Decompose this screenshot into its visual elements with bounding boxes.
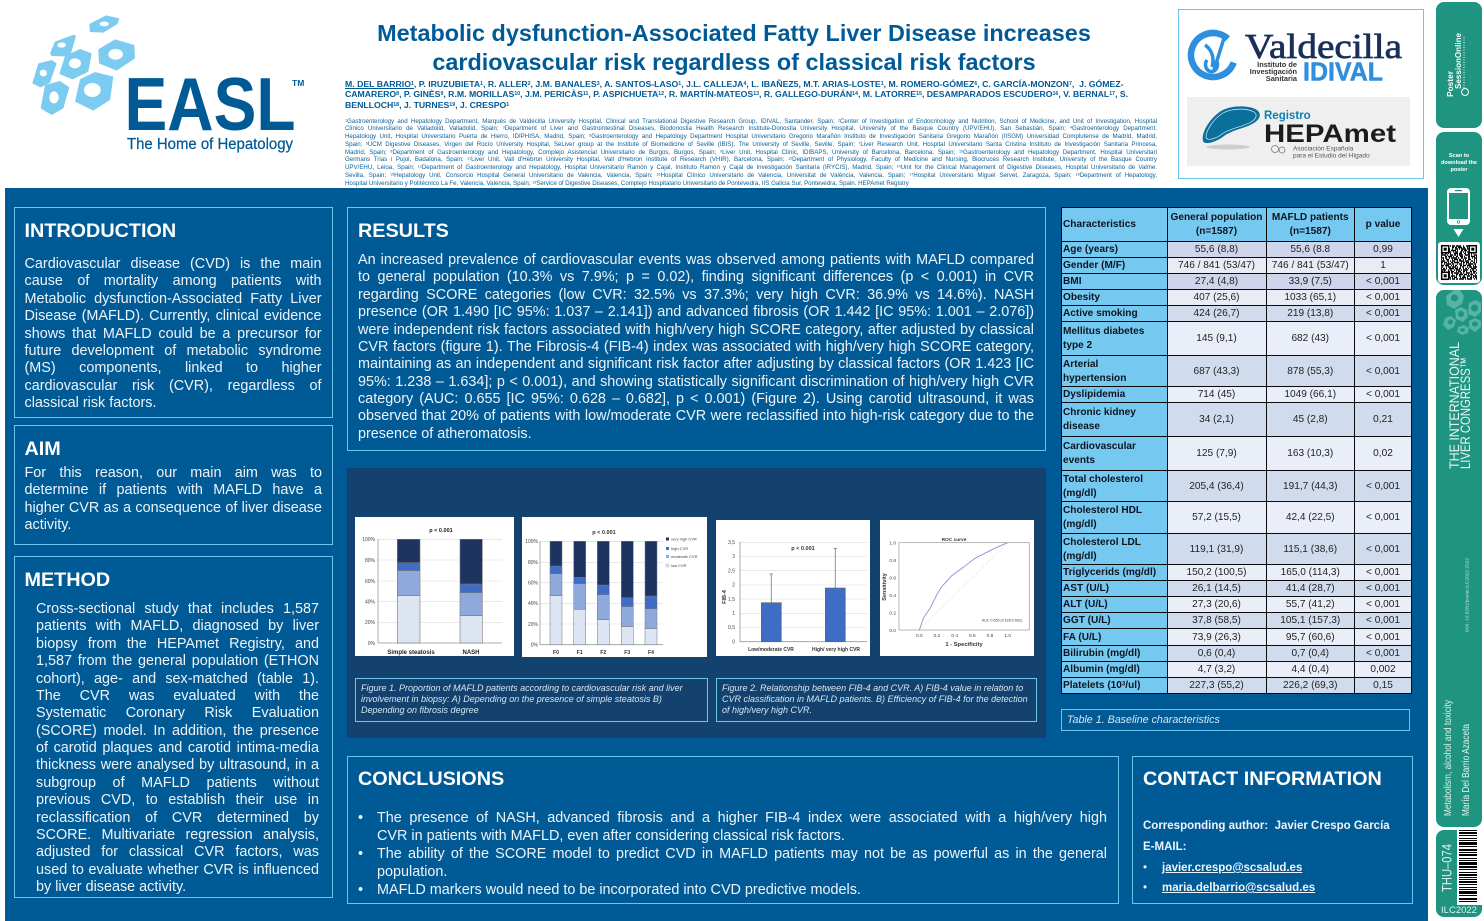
table: baseline characteristics: < 0,001	[1366, 544, 1400, 554]
chart: FIB-4 by CVR: 2,5	[728, 568, 735, 574]
table: baseline characteristics: Age (years)	[1063, 244, 1118, 255]
text: method: previous CVD, to establish their use in	[36, 792, 319, 808]
affiliations: Germans Trias i Pujol, Badalona, Spain; 11Liver Unit, Vall d'Hebron University Hospital, Vall d'Hebron Institute of Research (VHIR), Barcelona, Spain; 12Department of Physiology, Faculty of Medicine and Nursing, Biocruces Research Institute, University of the Basque Country	[345, 156, 1157, 163]
table: baseline characteristics: Triglycerids (mg/dl)	[1063, 567, 1156, 578]
text: introduction: Metabolic dysfunction-Associated Fatty Liver	[24, 291, 322, 307]
side strip: poster session online	[1436, 2, 1482, 128]
title: cardiovascular risk regardless of classical risk factors	[432, 49, 1036, 75]
table: baseline characteristics: 55,7 (41,2)	[1286, 599, 1335, 610]
table: baseline characteristics: 191,7 (44,3)	[1283, 480, 1337, 492]
table: baseline characteristics: type 2	[1063, 340, 1092, 351]
table: baseline characteristics: 34 (2,1)	[1199, 414, 1234, 425]
figure 2 caption: Figure 2. Relationship between FIB-4 and CVR. A) FIB-4 value in relation to	[722, 683, 1023, 693]
chart: CVR by fibrosis degree	[522, 517, 707, 657]
text: conclusions: population.	[377, 864, 447, 880]
panel: contact information	[1132, 756, 1413, 904]
text: introduction: cause of mortality among patients with	[24, 273, 322, 289]
logo: Valdecilla IDIVAL: IDIVAL	[1303, 56, 1383, 86]
chart: CVR by fibrosis degree: 20%	[528, 622, 539, 628]
chart: ROC curve: 0.6	[889, 576, 896, 582]
table: baseline characteristics: 41,4 (28,7)	[1286, 583, 1335, 594]
figure 2 caption: of high/very high CVR.	[722, 705, 812, 715]
table: baseline characteristics: 33,9 (7,5)	[1289, 276, 1332, 287]
table: baseline characteristics: 55,6 (8,8)	[1195, 244, 1238, 255]
text: conclusions: The ability of the SCORE model to predict CVD in MAFLD patients may not be as powerful as in the general	[377, 846, 1107, 862]
figure 1 caption: Figure 1. Proportion of MAFLD patients according to cardiovascular risk and liver	[361, 683, 683, 693]
text: method: biopsy from the HEPAmet Registry, and	[36, 636, 319, 652]
table: baseline characteristics: MAFLD patients	[1272, 212, 1349, 223]
table: baseline characteristics: 407 (25,6)	[1193, 292, 1240, 303]
table: baseline characteristics: Platelets (103/ul)	[1063, 680, 1140, 691]
logo: Registro HEPAmet: Asociación Española	[1293, 146, 1354, 152]
text: results: were independent risk factors associated with high/very high SCORE category, after adjusted by classical	[358, 322, 1034, 338]
table: baseline characteristics: 125 (7,9)	[1196, 448, 1237, 459]
chart legend: low CVR	[671, 563, 687, 568]
authors: M. DEL BARRIO1, P. IRUZUBIETA1, R. ALLER2, J.M. BANALES3, A. SANTOS-LASO1, J.L. CALLEJA4, L. IBAÑEZ5, M.T. ARIAS-LOSTE1, M. ROMERO-GÓMEZ6, C. GARCÍA-MONZON7, J. GÓMEZ-	[345, 79, 1124, 89]
chart: ROC curve: 0.4	[951, 633, 958, 639]
text: conclusions	[377, 810, 1107, 898]
text: method: SCORE. Multivariate regression analysis,	[36, 827, 319, 843]
bullet markers: •	[358, 810, 363, 826]
chart: FIB-4 by CVR: 0,5	[728, 625, 735, 631]
side strip logo text: Poster	[1446, 71, 1455, 97]
text: method: thickness were analysed by ultrasound, in a	[36, 757, 319, 773]
QR code	[1438, 242, 1480, 283]
heading: method: METHOD	[24, 569, 110, 591]
panel: results	[347, 207, 1046, 451]
text: introduction: shows that MAFLD could be a precursor for	[24, 326, 322, 342]
text: results: observed that 20% of patients with low/moderate CVR were reclassified into high-risk category due to the	[358, 408, 1034, 424]
table: baseline characteristics: Gender (M/F)	[1063, 260, 1125, 271]
panel: introduction	[14, 207, 333, 418]
affiliations: Hepatology Unit, Hospital Universitario Puerta de Hierro, IDIPHISA, Madrid, Spain; 5Gastroenterology and Hepatology Department Hospital Universitario Gregorio Marañón Instituto de Investigación Sanitaria Gregorio Marañón (IISGM) Universidad Complutense de Madrid, Madrid,	[345, 133, 1157, 140]
chart: FIB-4 by CVR	[716, 520, 870, 656]
table: baseline characteristics: 0,15	[1373, 680, 1393, 691]
text: aim: higher CVR as a consequence of liver disease	[24, 500, 322, 516]
table: baseline characteristics: 1033 (65,1)	[1284, 292, 1336, 303]
table: baseline characteristics: < 0,001	[1366, 276, 1400, 287]
panel: aim	[14, 425, 333, 545]
text: method: Cross-sectional study that includes 1,587	[36, 601, 319, 617]
chart: CVR by fibrosis degree: 100%	[525, 539, 539, 545]
table: baseline characteristics: 37,8 (58,5)	[1192, 615, 1241, 626]
trademark: TM	[292, 78, 304, 88]
side strip: scan to download	[1436, 132, 1482, 285]
figure 1 caption	[355, 678, 708, 722]
chart: FIB-4 by CVR: 1,5	[728, 597, 735, 603]
text: method: Systematic Coronary Risk Evaluation	[36, 705, 319, 721]
table: baseline characteristics: (n=1587)	[1196, 226, 1237, 237]
text: results: maintaining as an independent and significant risk factor after adjusting by classical factors (OR 1.423 [IC	[358, 356, 1034, 372]
table: baseline characteristics: 746 / 841 (53/47)	[1272, 260, 1349, 271]
text: e-mail addresses: javier.crespo@scsalud.es	[1162, 862, 1302, 874]
table: baseline characteristics: Dyslipidemia	[1063, 389, 1125, 400]
logo: Registro HEPAmet: Registro	[1264, 110, 1311, 122]
chart: FIB-4 by CVR: FIB-4	[722, 589, 728, 604]
table: baseline characteristics: 1	[1380, 260, 1386, 271]
hexagon decoration and rotated labels: Metabolism, alcohol and toxicity	[1442, 699, 1454, 816]
chart: FIB-4 by CVR: p < 0.001	[791, 546, 815, 552]
chart: ROC curve: 1 - Specificity	[945, 642, 983, 648]
authors: BENLLOCH18, J. TURNES19, J. CRESPO1	[345, 100, 509, 110]
text: method: cohort), age- and sex-matched (table 1).	[36, 670, 319, 686]
table: baseline characteristics: Obesity	[1063, 292, 1100, 303]
text: results: 95%: 1.238 – 1.634]; p < 0.001), and showing statistically significant discrimination of high/very high CVR	[358, 374, 1034, 390]
main blue background	[5, 188, 1428, 921]
table: baseline characteristics: 0,002	[1370, 664, 1396, 675]
affiliations: 1Gastroenterology and Hepatology Department, Marqués de Valdecilla University Hospital, Clinical and Translational Digestive Research Group, IDIVAL, Santander, Spain; 2Center of Investigation of Endocrinology and Nutrition, School of Medicine, and Unit of Investigation, Hospital	[345, 118, 1157, 124]
side strip logo text: SessionOnline	[1454, 32, 1463, 89]
table: baseline characteristics: < 0,001	[1366, 567, 1400, 578]
text: method: adjusted for classical CVR factors, was	[36, 844, 319, 860]
table: baseline characteristics: 878 (55,3)	[1287, 366, 1333, 376]
table: baseline characteristics: Cardiovascular	[1063, 441, 1136, 452]
table: baseline characteristics: < 0,001	[1366, 599, 1400, 610]
table: baseline characteristics: 205,4 (36,4)	[1189, 480, 1244, 492]
chart: CVR by fibrosis degree: 60%	[528, 580, 539, 586]
table: baseline characteristics: < 0,001	[1366, 389, 1400, 400]
side strip: congress and session details	[1436, 290, 1482, 827]
table: baseline characteristics: 55,6 (8.8	[1290, 244, 1330, 255]
table: baseline characteristics: Total cholesterol	[1063, 474, 1143, 484]
bullet markers	[358, 810, 363, 898]
table: baseline characteristics: 105,1 (157,3)	[1280, 615, 1340, 626]
chart: FIB-4 by CVR: 3,5	[728, 540, 735, 546]
affiliations: Spain; 6UCM Digestive Diseases, Virgen del Rocío University Hospital, SeLiver group at the Institute of Biomedicine of Seville (IBIS), The University of Seville, Seville, Spain; 7Liver Research Unit, Hospital Universitario Santa Cristina Instituto de Investigación Sanitaria Princesa,	[345, 141, 1157, 148]
chart: ROC curve: 0.0	[916, 633, 923, 639]
text: method	[36, 601, 319, 895]
table: baseline characteristics: Characteristics	[1063, 219, 1136, 230]
table: baseline characteristics: 4,4 (0,4)	[1291, 664, 1329, 675]
chart: ROC curve: 0.6	[969, 633, 976, 639]
table: baseline characteristics: 57,2 (15,5)	[1192, 512, 1241, 523]
chart: CVR by steatosis: 60%	[365, 579, 376, 585]
table: baseline characteristics: < 0,001	[1366, 512, 1400, 523]
chart: CVR by steatosis: p < 0.001	[429, 528, 453, 534]
text: results	[358, 252, 1034, 442]
chart: ROC curve: 1.0	[889, 540, 896, 546]
scan prompt: Scan to download the poster	[1441, 153, 1477, 173]
poster number: THU–074	[1438, 844, 1454, 892]
hexagon decoration and rotated labels: THE INTERNATIONAL	[1447, 342, 1462, 469]
table: baseline characteristics: 0,99	[1373, 244, 1393, 255]
table: baseline characteristics: < 0,001	[1366, 615, 1400, 626]
title: Metabolic dysfunction-Associated Fatty Liver Disease increases	[377, 20, 1091, 46]
text: method: reclassification of CVR determined by	[36, 810, 319, 826]
figure 2 caption	[716, 678, 1037, 722]
text: introduction: (MS) components, linked to higher	[24, 360, 322, 376]
table: baseline characteristics: 26,1 (14,5)	[1192, 583, 1241, 594]
text: aim	[24, 465, 322, 533]
figure 1 caption: Depending on fibrosis degree	[361, 705, 479, 715]
table: baseline characteristics: ALT (U/L)	[1063, 599, 1108, 610]
table: baseline characteristics: 95,7 (60,6)	[1286, 632, 1335, 642]
partner logos box	[1178, 9, 1424, 179]
chart: ROC curve: 0.2	[889, 610, 896, 616]
chart: CVR by fibrosis degree: 80%	[528, 560, 539, 566]
text: conclusions: CVR in patients with MAFLD, even after considering classical risk factors.	[377, 828, 845, 844]
table: baseline characteristics: 714 (45)	[1198, 389, 1235, 400]
chart: FIB-4 by CVR: 0	[732, 640, 735, 646]
affiliations: Clínico Universitario de Valladolid, Valladolid, Spain; 3Department of Liver and Gastrointestinal Diseases, Biodonostia Health Research Institute-Donostia University Hospital, University of the Basque Country (UPV/EHU), San Sebastián, Spain; 4Gastroenterology Department.	[345, 125, 1157, 132]
text: e-mail addresses	[1143, 862, 1316, 894]
table: baseline characteristics: Bilirubin (mg/dl)	[1063, 648, 1140, 659]
chart: ROC curve: 0.2	[934, 633, 941, 639]
affiliations: Sevilla, Spain; 15Hepatology Unit, Consorcio Hospital General Universitario de Valencia, Valencia, Spain; 16Hospital Clínico Universitario de Valencia, Universitat de València, Valencia, Spain; 17Hospital Universitario Miguel Servet, Zaragoza, Spain; 18Department of Hepatology,	[345, 172, 1157, 179]
table: baseline characteristics: Mellitus diabetes	[1063, 326, 1144, 337]
chart: ROC curve: 0.0	[889, 628, 896, 634]
chart: FIB-4 by CVR: 1	[732, 611, 735, 617]
table: baseline characteristics: 0,6 (0,4)	[1198, 648, 1235, 659]
table: baseline characteristics: 42,4 (22,5)	[1286, 512, 1335, 523]
table: baseline characteristics: AST (U/L)	[1063, 583, 1109, 594]
table: baseline characteristics: 145 (9,1)	[1196, 333, 1237, 344]
text: method: (SCORE) model. In addition, the presence	[36, 723, 319, 739]
affiliations	[345, 118, 1157, 187]
text: introduction: future development of metabolic syndrome	[24, 343, 322, 359]
table: baseline characteristics: < 0,001	[1366, 583, 1400, 594]
chart: CVR by steatosis: 20%	[365, 620, 376, 626]
chart legend	[666, 536, 698, 568]
heading: introduction: INTRODUCTION	[24, 220, 176, 242]
chart legend: very high CVR	[671, 536, 697, 542]
chart: CVR by steatosis: NASH	[462, 650, 480, 656]
text: method: used to evaluate whether CVR is influenced	[36, 862, 319, 878]
table: baseline characteristics: 687 (43,3)	[1193, 366, 1240, 376]
logo: Registro HEPAmet: para el Estudio del Hígado	[1293, 152, 1370, 160]
table: baseline characteristics: < 0,001	[1366, 480, 1400, 492]
table: baseline characteristics: Arterial	[1063, 358, 1098, 370]
text: conclusions: MAFLD markers would need to be incorporated into CVD predictive models.	[377, 882, 861, 898]
chart: CVR by fibrosis degree: F1	[577, 650, 583, 656]
chart: CVR by steatosis: Simple steatosis	[387, 650, 435, 656]
chart: ROC curve: 0.4	[889, 593, 896, 599]
panel: conclusions	[347, 756, 1119, 904]
chart legend: high CVR	[671, 546, 688, 551]
chart: FIB-4 by CVR: Low/moderate CVR	[748, 647, 794, 653]
panel: figures	[347, 468, 1046, 738]
table: baseline characteristics: < 0,001	[1366, 333, 1400, 344]
table: baseline characteristics: FA (U/L)	[1063, 632, 1101, 642]
text: results: CVR factors (figure 1). The Fibrosis-4 (FIB-4) index was associated with high/very high SCORE category,	[358, 339, 1034, 355]
text: method: subgroup of MAFLD patients without	[36, 775, 319, 791]
logo: Valdecilla IDIVAL: Sanitaria	[1266, 74, 1298, 83]
table: baseline characteristics: 226,2 (69,3)	[1283, 680, 1337, 691]
text: method: The CVR was evaluated with the	[36, 688, 319, 704]
table: baseline characteristics: General population	[1170, 212, 1262, 223]
logo: Registro HEPAmet: HEPAmet	[1264, 120, 1397, 148]
text: conclusions: The presence of NASH, advanced fibrosis and a higher FIB-4 index were associated with a high/very high	[377, 810, 1107, 826]
table: baseline characteristics: < 0,001	[1366, 632, 1400, 642]
table: baseline characteristics: 0,21	[1373, 414, 1393, 425]
chart: CVR by steatosis: 100%	[362, 537, 376, 543]
text: e-mail addresses: maria.delbarrio@scsalud.es	[1162, 882, 1315, 894]
text: e-mail addresses: •	[1143, 862, 1147, 874]
text: introduction: classical risk factors.	[24, 395, 156, 411]
text: results: to general population (10.3% vs 7.9%; p = 0.02), finding significant differences (p < 0.001) in CVR	[358, 269, 1034, 285]
table: baseline characteristics: 27,3 (20,6)	[1192, 599, 1241, 610]
table: baseline characteristics: Chronic kidney	[1063, 407, 1136, 418]
hexagon decoration and rotated labels: DOI: 10.5281/poster.ILC2022.2022	[1464, 557, 1470, 632]
chart: CVR by fibrosis degree: 0%	[531, 642, 539, 648]
barcode area	[1457, 830, 1482, 905]
figure 2 caption: CVR classification in MAFLD patients. B) Efficiency of FIB-4 for the detection	[722, 694, 1028, 704]
text: method: 1,587 from the general population (ETHON	[36, 653, 319, 669]
table: baseline characteristics: 424 (26,7)	[1193, 308, 1240, 319]
heading: results: RESULTS	[358, 220, 449, 242]
EASL logo	[32, 15, 304, 153]
logo: Registro HEPAmet	[1187, 97, 1410, 166]
heading: conclusions: CONCLUSIONS	[358, 768, 504, 790]
table: baseline characteristics: Albumin (mg/dl)	[1063, 664, 1140, 675]
authors: CAMARERO8, P. GINÈS9, R.M. MORILLAS10, J.M. PERICÀS11, P. ASPICHUETA12, R. MARTÍN-MATEOS13, R. GALLEGO-DURÁN14, M. LATORRE15, DESAMPARADOS ESCUDERO16, V. BERNAL17, S.	[345, 89, 1128, 99]
chart: ROC curve: AUC 0.655 (0.628-0.682)	[982, 618, 1022, 622]
logo: Valdecilla IDIVAL	[1188, 27, 1403, 86]
table: baseline characteristics: BMI	[1063, 276, 1082, 287]
table caption: Table 1. Baseline characteristics	[1067, 714, 1220, 726]
table: baseline characteristics: 682 (43)	[1291, 333, 1329, 344]
chart: CVR by fibrosis degree: F2	[600, 650, 606, 656]
table: baseline characteristics: disease	[1063, 421, 1100, 432]
logo tagline: The Home of Hepatology	[127, 136, 293, 153]
hexagon decoration and rotated labels: María Del Barrio Azaceta	[1460, 724, 1472, 816]
table: baseline characteristics: 219 (13,8)	[1287, 308, 1333, 319]
logo: Valdecilla IDIVAL: Instituto de	[1257, 60, 1297, 69]
table: baseline characteristics: Cholesterol HDL	[1063, 505, 1142, 516]
table: baseline characteristics: hypertension	[1063, 372, 1126, 384]
table: baseline characteristics: 119,1 (31,9)	[1190, 544, 1243, 554]
chart: ROC curve: Sensitivity	[882, 572, 888, 601]
table: baseline characteristics: (mg/dl)	[1063, 550, 1097, 562]
text: introduction: cardiovascular risk (CVR), regardless of	[24, 378, 322, 394]
table: baseline characteristics: Cholesterol LDL	[1063, 536, 1141, 548]
icon: phone	[1447, 188, 1470, 237]
table: baseline characteristics: GGT (U/L)	[1063, 615, 1111, 626]
chart: ROC curve: ROC curve	[942, 537, 967, 543]
table: baseline characteristics: events	[1063, 455, 1095, 466]
chart: CVR by fibrosis degree: p < 0.001	[592, 530, 616, 536]
icon: hexagon cluster	[32, 15, 135, 115]
affiliations: UPV/EHU, Leioa, Spain; 13Department of Gastroenterology and Hepatology, Hospital Universitario Ramón y Cajal, Instituto Ramón y Cajal de Investigación Sanitaria (IRYCIS), Madrid, Spain; 14Unit for the Clinical Management of Digestive Diseases, Hospital Universitario de Valme.	[345, 164, 1157, 171]
table: baseline characteristics	[1061, 207, 1412, 694]
text: introduction	[24, 256, 322, 411]
label: e-mail: E-MAIL:	[1143, 841, 1186, 853]
chart: CVR by steatosis	[355, 517, 514, 656]
chart: CVR by steatosis: 40%	[365, 600, 376, 606]
heading: aim: AIM	[24, 438, 61, 460]
table: baseline characteristics: 165,0 (114,3)	[1281, 567, 1340, 578]
table: baseline characteristics: 45 (2,8)	[1293, 414, 1328, 425]
table: baseline characteristics: 150,2 (100,5)	[1186, 567, 1247, 578]
bullet markers: •	[358, 846, 363, 862]
text: method: of carotid plaques and carotid intima-media	[36, 740, 319, 756]
heading: contact information: CONTACT INFORMATION	[1143, 768, 1382, 790]
text: results: regarding SCORE categories (low CVR: 32.5% vs 37.3%; very high CVR: 36.9% vs 14.6%). NASH	[358, 287, 1034, 303]
text: results: An increased prevalence of cardiovascular events was observed among patients with MAFLD compared	[358, 252, 1034, 268]
table: baseline characteristics: 0,02	[1373, 448, 1393, 459]
text: results: presence of atheromatosis.	[358, 426, 532, 442]
chart: CVR by fibrosis degree: F4	[648, 650, 654, 656]
logo: Valdecilla IDIVAL: Valdecilla	[1245, 27, 1403, 66]
table: baseline characteristics: 746 / 841 (53/47)	[1178, 260, 1255, 271]
figure 1 caption: involvement in biopsy: A) Depending on the presence of simple steatosis B)	[361, 694, 662, 704]
table: baseline characteristics: Active smoking	[1063, 308, 1138, 319]
text: method: patients with MAFLD, diagnosed by liver	[36, 618, 319, 634]
chart: CVR by fibrosis degree: F0	[553, 650, 559, 656]
text: introduction: Cardiovascular disease (CVD) is the main	[24, 256, 322, 272]
chart: FIB-4 by CVR: 3	[732, 554, 735, 560]
chart: ROC curve	[880, 520, 1034, 656]
table: baseline characteristics: 227,3 (55,2)	[1189, 680, 1244, 691]
text: aim: determine if patients with MAFLD have a	[24, 482, 322, 498]
table: baseline characteristics: 1049 (66,1)	[1284, 389, 1336, 400]
text: aim: For this reason, our main aim was to	[24, 465, 322, 481]
text: results: presence (OR 1.490 [IC 95%: 1.037 – 2.141]) and advanced fibrosis (OR 1.442 [IC 95%: 1.001 – 2.076])	[358, 304, 1034, 320]
table caption	[1061, 709, 1410, 731]
text: introduction: Disease (MAFLD). Currently, clinical evidence	[24, 308, 322, 324]
table: baseline characteristics: < 0,001	[1366, 648, 1400, 659]
chart: ROC curve: 1.0	[1004, 633, 1011, 639]
chart: ROC curve: 0.8	[987, 633, 994, 639]
title	[377, 20, 1091, 75]
chart: FIB-4 by CVR: 2	[732, 582, 735, 588]
table: baseline characteristics: 73,9 (26,3)	[1192, 632, 1241, 642]
text: corresponding author: Corresponding author: Javier Crespo García	[1143, 820, 1390, 832]
table: baseline characteristics: < 0,001	[1366, 308, 1400, 319]
affiliations: Hospital Universitario y Politécnico La Fe, Valencia, Valencia, Spain; 19Service of Digestive Diseases, Complejo Hospitalario Universitario de Pontevedra, IIS Galicia Sur, Pontevedra, Spain. HEPAmet Registry	[345, 180, 909, 187]
table: baseline characteristics: 163 (10,3)	[1287, 448, 1333, 459]
text: e-mail addresses: •	[1143, 882, 1147, 894]
side strip logo text	[1446, 32, 1469, 97]
chart: FIB-4 by CVR: High/ very high CVR	[812, 647, 860, 653]
table: baseline characteristics: 0,7 (0,4)	[1291, 648, 1329, 659]
chart legend: moderate CVR	[671, 554, 698, 559]
panel: method	[14, 556, 333, 898]
text: aim: activity.	[24, 517, 71, 533]
logo: Valdecilla IDIVAL: Investigación	[1250, 67, 1297, 76]
table: baseline characteristics: 115,1 (38,6)	[1283, 544, 1337, 554]
authors	[345, 79, 1128, 110]
table: baseline characteristics: < 0,001	[1366, 292, 1400, 303]
table: baseline characteristics: (mg/dl)	[1063, 488, 1097, 498]
table: baseline characteristics: (n=1587)	[1290, 226, 1331, 237]
chart: CVR by fibrosis degree: F3	[624, 650, 630, 656]
text: method: by liver disease activity.	[36, 879, 186, 895]
bullet markers: •	[358, 882, 363, 898]
table: baseline characteristics: 27,4 (4,8)	[1195, 276, 1238, 287]
table: baseline characteristics: < 0,001	[1366, 366, 1400, 376]
table: baseline characteristics: (mg/dl)	[1063, 519, 1097, 530]
table: baseline characteristics: 4,7 (3,2)	[1198, 664, 1235, 675]
chart: ROC curve: 0.8	[889, 558, 896, 564]
hexagon decoration and rotated labels	[1442, 290, 1481, 816]
affiliations: Madrid, Spain; 8Department of Gastroenterology and Hepatology, Complejo Asistencial Universitario de Burgos, Burgos, Spain; 9Liver Unit, Hospital Clínic, IDIBAPS, University of Barcelona, Barcelona, Spain; 10Gastroenterology and Hepatology Department, Hospital Universitari	[345, 149, 1157, 156]
table: baseline characteristics: p value	[1366, 219, 1400, 230]
side strip: poster number and barcode	[1436, 830, 1482, 917]
hexagon decoration and rotated labels: LIVER CONGRESS™	[1458, 357, 1473, 469]
chart: CVR by fibrosis degree: 40%	[528, 601, 539, 607]
congress code: ILC2022	[1441, 905, 1477, 916]
chart: CVR by steatosis: 0%	[368, 641, 376, 647]
text: results: category (AUC: 0.655 [IC 95%: 0.628 – 0.682], p < 0.001) (Figure 2). Using carotid ultrasound, it was	[358, 391, 1034, 407]
chart: CVR by steatosis: 80%	[365, 558, 376, 564]
